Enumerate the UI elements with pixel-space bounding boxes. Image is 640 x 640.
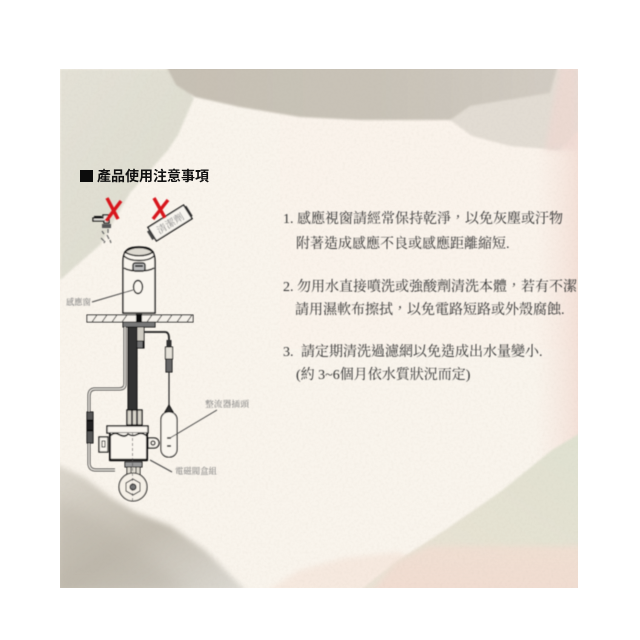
- solenoid valve box: [99, 410, 159, 460]
- label: rectifier plug: [170, 398, 249, 438]
- cable to rectifier: [144, 332, 173, 412]
- counter top: [87, 314, 193, 322]
- centre line: [132, 433, 134, 503]
- rectifier plug: [161, 412, 177, 457]
- label: sensor window: [66, 290, 133, 307]
- label: sensor window: 感應窗: [66, 297, 91, 307]
- heading text: 產品使用注意事項: [97, 168, 209, 184]
- item 1: [283, 210, 563, 252]
- left wire with connector: [87, 327, 125, 470]
- mounting flange and stem: [123, 322, 155, 348]
- braided hose: [128, 327, 137, 411]
- item 1: 附著造成感應不良或感應距離縮短.: [296, 235, 510, 252]
- item 3: 3.: [283, 345, 294, 360]
- item 2: 請用濕軟布擦拭，以免電路短路或外殼腐蝕.: [295, 301, 564, 318]
- diagram: faucet installation: [66, 198, 249, 503]
- heading: product usage notes: [80, 168, 209, 184]
- item 2: 2. 勿用水直接噴洗或強酸劑清洗本體，若有不潔: [283, 278, 577, 295]
- icon: cleaner bottle crossed out: [145, 198, 194, 243]
- label: solenoid valve box: [150, 460, 217, 476]
- icon: cleaner bottle crossed out: 清潔劑: [154, 210, 186, 237]
- panel: watercolor paper background: [56, 66, 582, 592]
- item 3: (約 3~6個月依水質狀況而定): [296, 366, 471, 383]
- faucet body: [123, 247, 155, 313]
- icon: running tap crossed out: [93, 198, 121, 243]
- label: solenoid valve box: 電磁閥盒組: [175, 466, 217, 476]
- text block: care instructions: [283, 210, 577, 383]
- item 3: [283, 343, 542, 383]
- item 3: 請定期清洗過濾網以免造成出水量變小.: [301, 343, 542, 360]
- item 1: 1. 感應視窗請經常保持乾淨，以免灰塵或汙物: [283, 210, 563, 227]
- item 2: [283, 278, 577, 318]
- label: rectifier plug: 整流器插頭: [205, 398, 249, 409]
- icon: heading square: [80, 170, 93, 182]
- valve inlet and wheel: [119, 462, 147, 501]
